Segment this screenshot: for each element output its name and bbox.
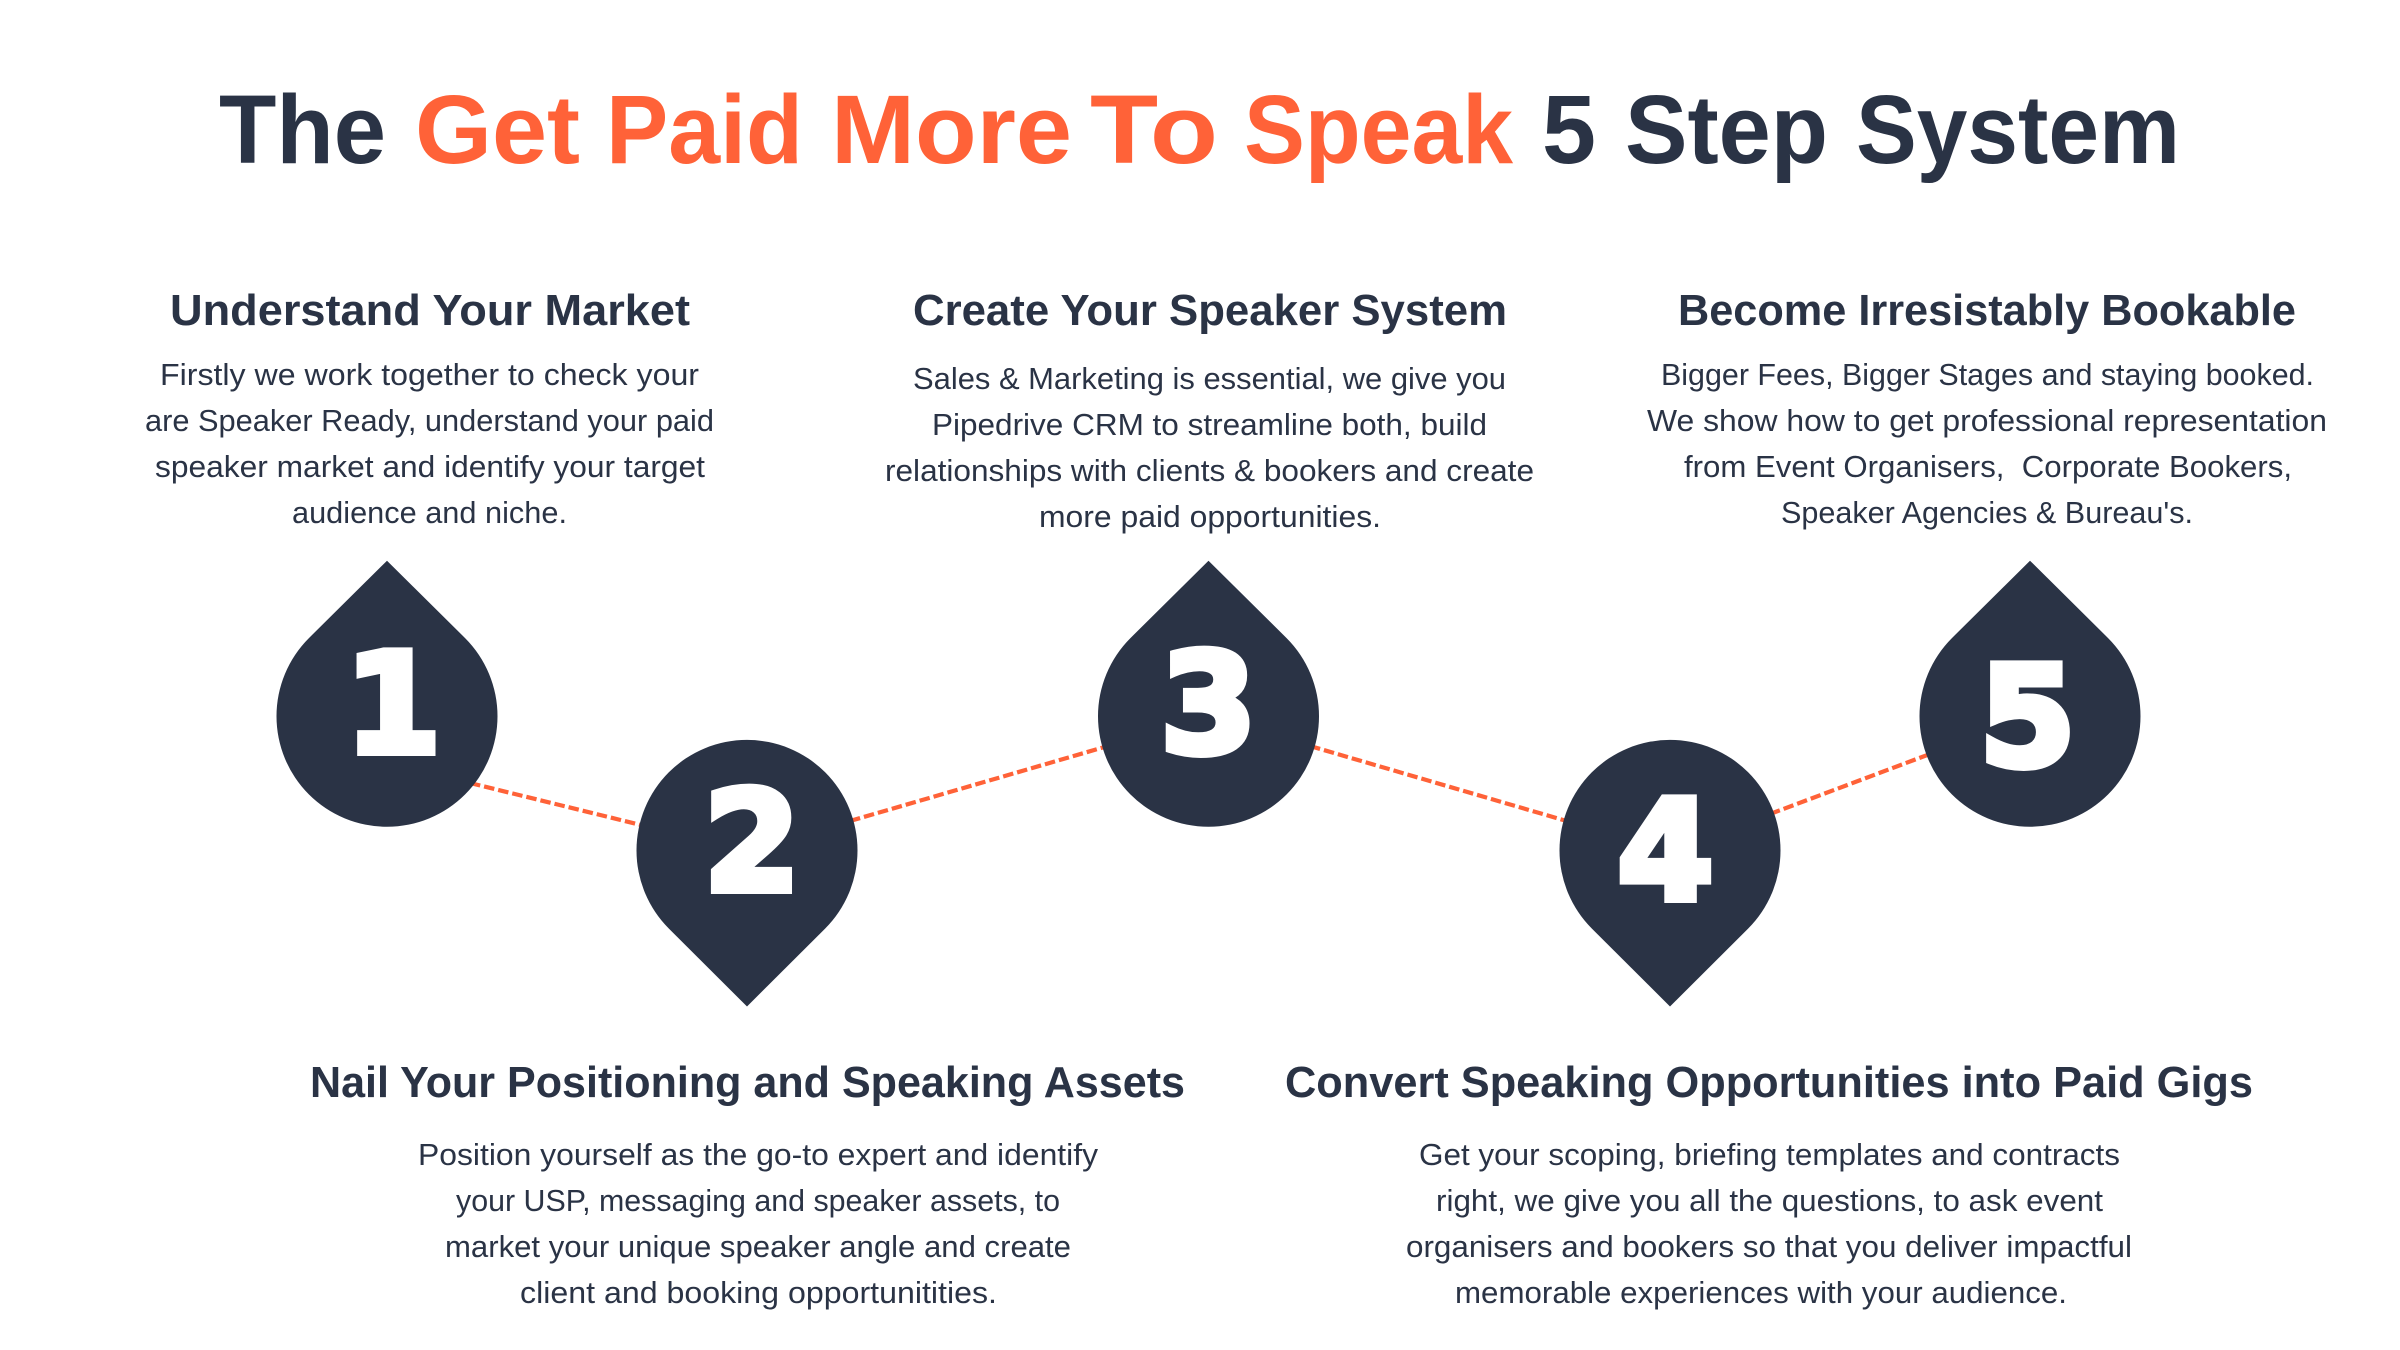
body text: step 2: client and booking opportunitities. [520,1275,997,1310]
panel: step 2 nail your positioning [310,1058,1185,1310]
dashed connector: step 3 to step 4 [1310,746,1570,822]
body text: step 1 [145,357,714,530]
body text: step 5: Speaker Agencies & Bureau's. [1781,495,2193,530]
pin: step 3 [1098,561,1319,827]
panel: step 3 create your speaker system [885,286,1534,534]
body text: step 5 [1647,357,2327,530]
body text: step 1: speaker market and identify your target [155,449,705,484]
title: Paid [606,75,803,184]
pin: step 2: 2 [704,762,800,923]
panel: step 1 understand your market [145,286,714,530]
heading: step 4: Convert Speaking Opportunities into Paid Gigs [1285,1058,2253,1107]
title: To [1090,75,1218,184]
body text: step 3: Pipedrive CRM to streamline both, build [932,407,1487,442]
pin: step 2 [637,740,858,1006]
pin: step 5: 5 [1979,637,2076,798]
body text: step 2: Position yourself as the go-to expert and identify [418,1137,1099,1172]
title: Get [415,75,580,184]
body text: step 5: from Event Organisers, Corporate Bookers, [1684,449,2292,484]
dashed connector: step 1 to step 2 [470,783,645,826]
heading: step 2: Nail Your Positioning and Speaking Assets [310,1058,1185,1107]
dashed connector: step 4 to step 5 [1770,754,1930,814]
title: More [831,75,1072,184]
body text: step 4: right, we give you all the questions, to ask event [1436,1183,2103,1218]
body text: step 3: relationships with clients & bookers and create [885,453,1534,488]
body text: step 5: We show how to get professional representation [1647,403,2327,438]
pin: step 5 [1920,561,2140,827]
title: Step [1625,75,1828,184]
title: Speak [1244,75,1514,184]
title [219,75,2180,184]
body text: step 4: Get your scoping, briefing templates and contracts [1419,1137,2120,1172]
panel: step 5 become irresistably bookable [1647,286,2327,530]
heading: step 5: Become Irresistably Bookable [1678,286,2296,335]
title: The [219,75,386,184]
body text: step 4: memorable experiences with your audience. [1455,1275,2067,1310]
title: 5 [1542,75,1596,184]
heading: step 1: Understand Your Market [170,286,690,335]
body text: step 3 [885,361,1534,534]
pin: step 1 [276,561,498,827]
panel: step 4 convert speaking opportunities [1285,1058,2253,1310]
body text: step 3: more paid opportunities. [1039,499,1381,534]
body text: step 5: Bigger Fees, Bigger Stages and staying booked. [1661,357,2314,392]
pin: step 4: 4 [1617,771,1714,932]
title: System [1856,75,2180,184]
dashed connector: step 2 to step 3 [850,746,1108,821]
body text: step 1: audience and niche. [292,495,567,530]
pin: step 4 [1560,740,1780,1006]
body text: step 2: market your unique speaker angle and create [445,1229,1071,1264]
pin: step 1: 1 [345,624,441,785]
body text: step 3: Sales & Marketing is essential, we give you [913,361,1506,396]
body text: step 2 [418,1137,1099,1310]
heading: step 3: Create Your Speaker System [913,286,1507,335]
body text: step 4: organisers and bookers so that you deliver impactful [1406,1229,2132,1264]
body text: step 1: are Speaker Ready, understand your paid [145,403,714,438]
pin: step 3: 3 [1160,624,1257,785]
body text: step 2: your USP, messaging and speaker assets, to [456,1183,1060,1218]
body text: step 4 [1406,1137,2132,1310]
body text: step 1: Firstly we work together to check your [160,357,699,392]
